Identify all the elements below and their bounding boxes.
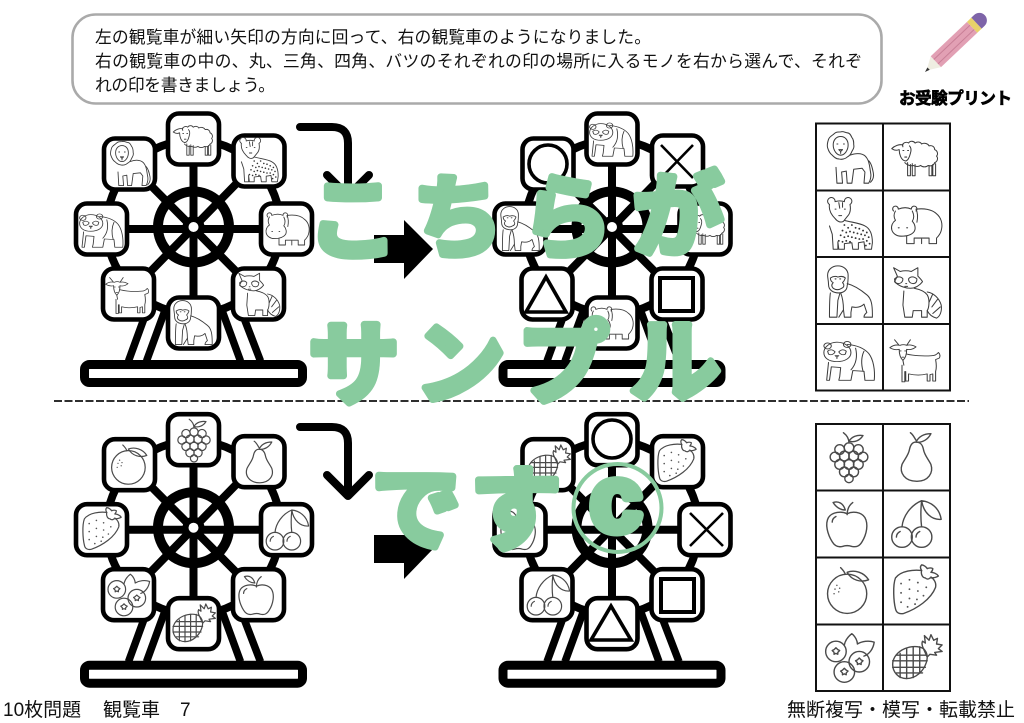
triangle mark bottom bbox=[591, 606, 631, 640]
watermark line 1: が bbox=[632, 167, 724, 268]
panda top bbox=[590, 123, 633, 156]
watermark line 2: サ bbox=[308, 316, 400, 417]
leopard bbox=[828, 198, 872, 249]
instruction line 1: 左の観覧車が細い矢印の方向に回って、右の観覧車のようになりました。 bbox=[95, 28, 651, 47]
circle mark bbox=[529, 145, 567, 183]
gorilla bbox=[828, 266, 872, 317]
instruction panel bbox=[72, 14, 882, 104]
panel: fruit wheel after rotation bbox=[494, 414, 730, 683]
watermark line 2: ル bbox=[629, 313, 721, 414]
divider dashed line bbox=[54, 400, 969, 402]
animal choices grid bbox=[816, 123, 950, 391]
pineapple top left bbox=[528, 445, 570, 483]
grapes top bbox=[178, 419, 210, 462]
panel: fruit wheel before rotation bbox=[76, 414, 312, 683]
goat bottom left bbox=[106, 278, 149, 314]
grapes bbox=[830, 433, 868, 483]
cross mark bbox=[661, 145, 693, 178]
big arrow bottom bbox=[374, 520, 433, 579]
pear top right bbox=[246, 441, 272, 483]
logo text: お受験プリント bbox=[899, 89, 1012, 108]
watermark line 1: ら bbox=[521, 169, 613, 270]
hippo bottom bbox=[590, 307, 633, 339]
thin rotation arrow bottom bbox=[300, 427, 369, 496]
panel: animal wheel before rotation bbox=[76, 114, 312, 382]
hippo bbox=[891, 206, 942, 244]
panda bbox=[824, 341, 874, 380]
panda left bbox=[80, 214, 123, 247]
big arrow top bbox=[374, 220, 433, 279]
lion top left bbox=[110, 141, 150, 186]
watermark line 2 bbox=[308, 313, 721, 417]
instruction line 3: れの印を書きましょう。 bbox=[95, 76, 275, 95]
square mark bbox=[660, 278, 693, 311]
gorilla bottom bbox=[174, 301, 212, 345]
icon: pencil bbox=[920, 10, 990, 77]
instruction line 2: 右の観覧車の中の、丸、三角、四角、バツのそれぞれの印の場所に入るモノを右から選んで、それぞ bbox=[95, 52, 862, 71]
raccoon bbox=[894, 268, 941, 318]
square mark bottom right bbox=[661, 579, 694, 612]
apple left bbox=[501, 511, 535, 549]
blueberry bbox=[826, 634, 874, 682]
watermark line 1: こ bbox=[307, 171, 399, 272]
sheep bbox=[892, 141, 938, 176]
apple bottom right bbox=[239, 576, 273, 614]
footer left: 観覧車 bbox=[103, 699, 160, 721]
thin rotation arrow top bbox=[300, 127, 369, 196]
panel: animal wheel after rotation bbox=[494, 114, 730, 382]
blueberry bottom left bbox=[108, 574, 150, 616]
cherry right bbox=[266, 510, 309, 550]
strawberry top right bbox=[658, 440, 696, 481]
pineapple bottom bbox=[173, 604, 215, 642]
gorilla left bbox=[501, 207, 539, 251]
watermark line 1: ち bbox=[412, 169, 504, 270]
footer right: 無断複写・模写・転載禁止 bbox=[787, 699, 1015, 721]
watermark line 3: す bbox=[470, 461, 562, 562]
sheep top bbox=[173, 126, 212, 155]
pear bbox=[901, 433, 932, 481]
footer left: 7 bbox=[180, 700, 191, 721]
pineapple bbox=[893, 635, 942, 679]
strawberry bbox=[894, 565, 938, 614]
sheep right bbox=[685, 215, 724, 244]
hippo right bbox=[266, 213, 309, 245]
footer left: 10枚問題 bbox=[3, 699, 81, 721]
goat bbox=[890, 340, 940, 382]
footer left bbox=[3, 699, 191, 721]
watermark copyright mark bbox=[574, 446, 662, 552]
fruit choices grid bbox=[816, 423, 950, 692]
sample watermark bbox=[307, 167, 724, 565]
cherry bbox=[892, 501, 941, 547]
watermark line 2: プ bbox=[517, 315, 609, 416]
raccoon bottom right bbox=[239, 273, 280, 316]
orange bbox=[828, 568, 869, 613]
strawberry left bbox=[83, 508, 121, 549]
watermark line 1 bbox=[307, 167, 724, 272]
watermark line 2: ン bbox=[414, 315, 506, 416]
apple bbox=[827, 502, 867, 547]
triangle mark bbox=[526, 277, 566, 312]
cross mark right bbox=[690, 513, 723, 546]
leopard top right bbox=[240, 137, 278, 182]
cherry bottom left bbox=[527, 575, 570, 615]
circle mark top bbox=[593, 420, 631, 458]
lion bbox=[827, 132, 874, 183]
watermark line 3 bbox=[365, 456, 562, 565]
watermark copyright mark: c bbox=[590, 446, 642, 551]
watermark line 3: で bbox=[365, 456, 465, 565]
orange top left bbox=[112, 445, 147, 484]
